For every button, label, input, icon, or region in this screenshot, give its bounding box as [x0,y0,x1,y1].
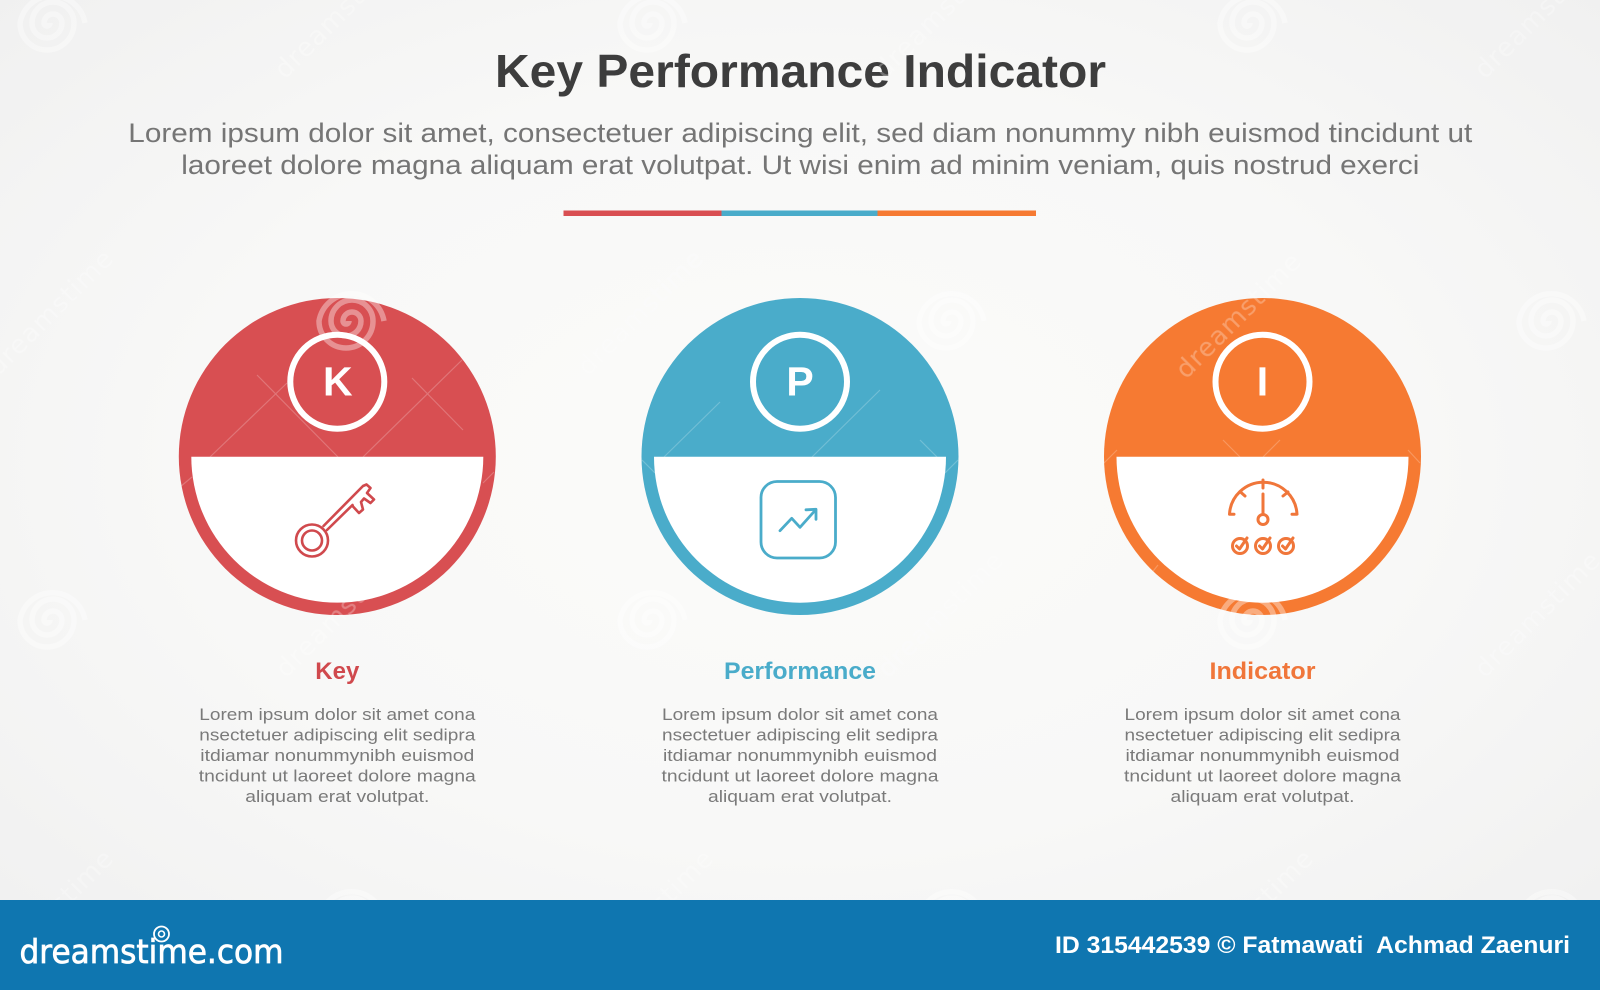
panel: indicator circle [1104,298,1421,615]
text block: key description [199,705,476,806]
icon: growth chart [761,482,836,558]
panel: key circle [179,298,496,615]
badge: letter I [1216,335,1310,429]
text: dreamstime [572,244,710,382]
badge: letter K: K [323,358,353,404]
footer bar [0,900,1600,990]
text block: indicator description: tncidunt ut laoreet dolore magna [1124,766,1402,786]
text block: indicator description: itdiamar nonummynibh euismod [1126,746,1400,765]
text block: performance description: Lorem ipsum dolor sit amet cona [662,705,939,724]
text: dreamstime [1182,844,1320,982]
label: Performance: Performance [724,658,876,685]
text block: performance description [662,705,939,806]
text block: indicator description: nsectetuer adipiscing elit sedipra [1124,726,1401,744]
badge: letter K [290,335,384,429]
text block: indicator description [1124,705,1402,806]
panel: performance circle [642,298,958,615]
title: Key Performance Indicator [495,45,1106,97]
icon: key [296,484,374,556]
text block: performance description: aliquam erat volutpat. [708,787,892,806]
subtitle text block: Lorem ipsum dolor sit amet, consectetuer adipiscing elit, sed diam nonummy nibh euismod tincidunt ut [128,118,1473,148]
text block: performance description: nsectetuer adipiscing elit sedipra [662,726,939,744]
text: dreamstime [1170,247,1308,385]
badge: letter P: P [786,358,814,404]
label: Indicator: Indicator [1210,658,1316,685]
icon: gauge with checks [1230,480,1297,554]
text block: performance description: itdiamar nonummynibh euismod [663,746,937,765]
tri-colour divider [564,210,1036,216]
text block: performance description: tncidunt ut laoreet dolore magna [662,766,939,786]
logo: dreamstime.com: dreamstime.com [20,932,284,971]
subtitle text block: laoreet dolore magna aliquam erat volutpat. Ut wisi enim ad minim veniam, quis nostrud exerci [181,150,1419,180]
text block: indicator description: Lorem ipsum dolor sit amet cona [1124,705,1401,724]
text block: key description: Lorem ipsum dolor sit amet cona [199,705,476,724]
text block: indicator description: aliquam erat volutpat. [1170,787,1354,806]
text: dreamstime [872,546,1010,684]
badge: letter I: I [1257,358,1268,404]
text: dreamstime [270,546,408,684]
text: dreamstime [582,844,720,982]
text block: key description: tncidunt ut laoreet dolore magna [199,766,476,786]
text block: key description: aliquam erat volutpat. [245,787,429,806]
credit text: ID 315442539 © Fatmawati Achmad Zaenuri [1055,932,1570,959]
text block: key description: itdiamar nonummynibh euismod [200,746,474,765]
subtitle text block [128,118,1473,180]
badge: letter P [753,335,847,429]
text block: key description: nsectetuer adipiscing elit sedipra [199,726,476,744]
label: Key: Key [315,658,360,685]
